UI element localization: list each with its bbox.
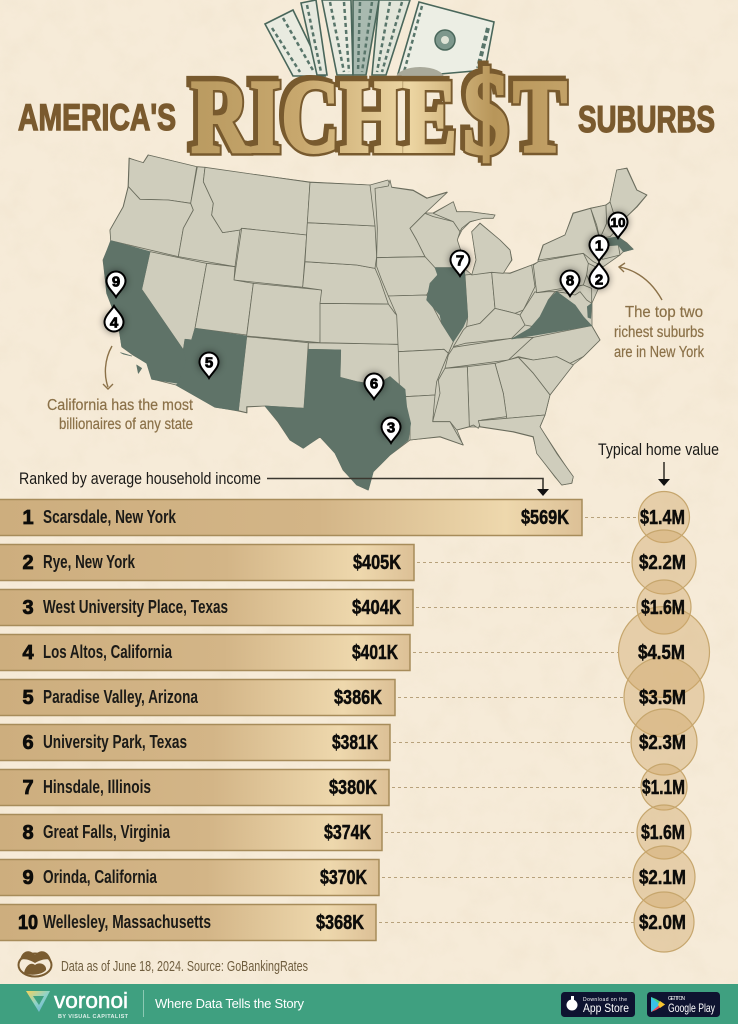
eastern states — [375, 168, 647, 485]
row 9: Orinda: $370K — [320, 867, 367, 889]
row 7: Hinsdale: 7 — [22, 777, 34, 799]
pin 10: 10 — [610, 215, 626, 230]
row 6: University Park: $381K — [332, 732, 378, 754]
callout text: New York: are in New York — [614, 344, 704, 361]
callout text: California: California has the most — [47, 397, 194, 414]
arrow: California callout — [103, 346, 113, 389]
row 7: Hinsdale: $380K — [329, 777, 377, 799]
badge: Google Play: Google Play — [668, 1001, 715, 1015]
pin 8 — [560, 270, 580, 296]
source note: Data as of June 18, 2024. Source: GoBankingRates — [61, 958, 308, 975]
row 6: University Park: 6 — [22, 732, 34, 754]
pin 5 — [200, 352, 218, 378]
row 9: Orinda: 9 — [22, 867, 34, 889]
row 10: Wellesley: $2.0M — [639, 912, 686, 934]
axis label: ranked by income: Ranked by average household income — [19, 469, 261, 488]
row 1: Scarsdale: $569K — [521, 507, 569, 529]
pin 3: 3 — [387, 420, 395, 436]
row 9: Orinda: $2.1M — [639, 867, 686, 889]
row 1: Scarsdale: Scarsdale, New York — [43, 507, 177, 527]
pin 7 — [450, 250, 470, 276]
row 2: Rye: Rye, New York — [43, 552, 136, 572]
tagline: Where Data Tells the Story — [155, 996, 304, 1011]
title: Riche$t extrusion: $ — [463, 48, 509, 179]
row 6: University Park: University Park, Texas — [43, 732, 187, 752]
title: America's: AMERICA'S — [18, 97, 176, 138]
pin 2 — [590, 263, 608, 288]
row 3: West University Place: $404K — [352, 597, 401, 619]
row 9: Orinda: Orinda, California — [43, 867, 158, 887]
row 1: Scarsdale: 1 — [22, 507, 34, 529]
row 8: Great Falls — [0, 814, 685, 850]
badge: Google Play: GET IT ON — [668, 996, 685, 1002]
row 2: Rye: $2.2M — [639, 552, 686, 574]
row 2: Rye — [0, 544, 686, 580]
arrow: New York callout — [619, 263, 662, 300]
pin 4 — [104, 306, 124, 332]
row 1: Scarsdale: $1.4M — [640, 507, 685, 529]
icon: voronoi logo — [26, 991, 50, 1012]
voronoi wordmark: voronoi — [54, 988, 128, 1013]
row 10: Wellesley — [0, 904, 686, 940]
row 6: University Park: $2.3M — [639, 732, 686, 754]
pin 1 — [590, 236, 608, 261]
row 8: Great Falls: $374K — [324, 822, 371, 844]
title: Riche$t extrusion: T — [513, 58, 567, 174]
row 5: Paradise Valley: 5 — [22, 687, 34, 709]
callout text: New York: The top two — [625, 304, 703, 321]
callout: California — [47, 346, 194, 433]
row 3: West University Place: $1.6M — [641, 597, 685, 619]
badge: Google Play — [647, 992, 720, 1017]
pin 3 — [382, 418, 400, 443]
row 8: Great Falls: $1.6M — [641, 822, 685, 844]
row 6: University Park — [0, 724, 686, 760]
icon: moustache emblem — [18, 951, 52, 976]
badge: App Store: Download on the — [583, 997, 627, 1003]
bar chart rows — [0, 500, 686, 940]
row 4: Los Altos: $4.5M — [638, 642, 685, 664]
row 2: Rye: $405K — [353, 552, 401, 574]
western states — [110, 155, 400, 413]
pin 8: 8 — [566, 272, 574, 290]
title — [18, 45, 715, 179]
row 10: Wellesley: $368K — [316, 912, 364, 934]
home value circles — [618, 492, 710, 952]
pin 10 — [608, 212, 628, 238]
callout: New York — [614, 263, 704, 361]
pin 1: 1 — [595, 238, 603, 254]
row 5: Paradise Valley — [0, 680, 686, 716]
dashed connector lines — [379, 518, 641, 922]
row 4: Los Altos: 4 — [22, 642, 34, 664]
axis label: typical home value — [598, 440, 719, 486]
badge: App Store: App Store — [583, 1001, 629, 1015]
row 5: Paradise Valley: $3.5M — [639, 687, 686, 709]
pin 5: 5 — [205, 354, 213, 372]
divider — [143, 990, 144, 1017]
illustration: fan of dollar bills — [265, 0, 494, 89]
axis label: ranked by income — [19, 469, 549, 496]
row 4: Los Altos — [0, 634, 685, 670]
title: Riche$t extrusion: RICHE — [191, 58, 457, 174]
title: Riche$t gold face: T — [513, 58, 567, 174]
row 4: Los Altos: $401K — [352, 642, 398, 664]
title: Riche$t gold face: $ — [463, 48, 509, 179]
row 3: West University Place: 3 — [22, 597, 34, 619]
title: Riche$t extrusion: T — [510, 54, 564, 172]
pin 6: 6 — [370, 376, 378, 392]
row 7: Hinsdale: Hinsdale, Illinois — [43, 777, 151, 797]
title: Riche$t extrusion: RICHE — [188, 54, 454, 172]
map silhouette — [103, 155, 647, 490]
row 7: Hinsdale — [0, 770, 685, 806]
pin 9: 9 — [112, 274, 120, 290]
pin 7: 7 — [456, 252, 464, 270]
row 3: West University Place — [0, 590, 685, 626]
callout text: California: billionaires of any state — [59, 416, 193, 433]
row 2: Rye: 2 — [22, 552, 34, 574]
by visual capitalist: BY VISUAL CAPITALIST — [58, 1014, 129, 1020]
row 8: Great Falls: Great Falls, Virginia — [43, 822, 171, 842]
row 10: Wellesley: 10 — [18, 912, 38, 934]
row 8: Great Falls: 8 — [22, 822, 34, 844]
row 5: Paradise Valley: $386K — [334, 687, 382, 709]
badge: App Store — [561, 992, 635, 1017]
pin shadows — [104, 212, 628, 437]
row 9: Orinda — [0, 860, 686, 896]
row 1: Scarsdale — [0, 500, 685, 536]
pin 9 — [106, 272, 126, 297]
callout text: New York: richest suburbs — [614, 324, 704, 341]
highlighted states: Illinois, Virginia, Massachusetts — [427, 237, 633, 342]
map of the United States — [103, 155, 647, 490]
row 10: Wellesley: Wellesley, Massachusetts — [43, 912, 211, 932]
pin 6 — [364, 374, 384, 399]
pin 4: 4 — [110, 314, 119, 332]
footer band — [0, 984, 738, 1024]
title: Riche$t gold face: RICHE — [191, 58, 457, 174]
title: Riche$t extrusion: $ — [460, 45, 506, 176]
row 3: West University Place: West University Place, Texas — [43, 597, 228, 617]
row 5: Paradise Valley: Paradise Valley, Arizona — [43, 687, 199, 707]
highlighted states: California, Arizona, Texas — [103, 241, 411, 490]
row 7: Hinsdale: $1.1M — [642, 777, 685, 799]
row 4: Los Altos: Los Altos, California — [43, 642, 173, 662]
pin 2: 2 — [595, 272, 603, 288]
